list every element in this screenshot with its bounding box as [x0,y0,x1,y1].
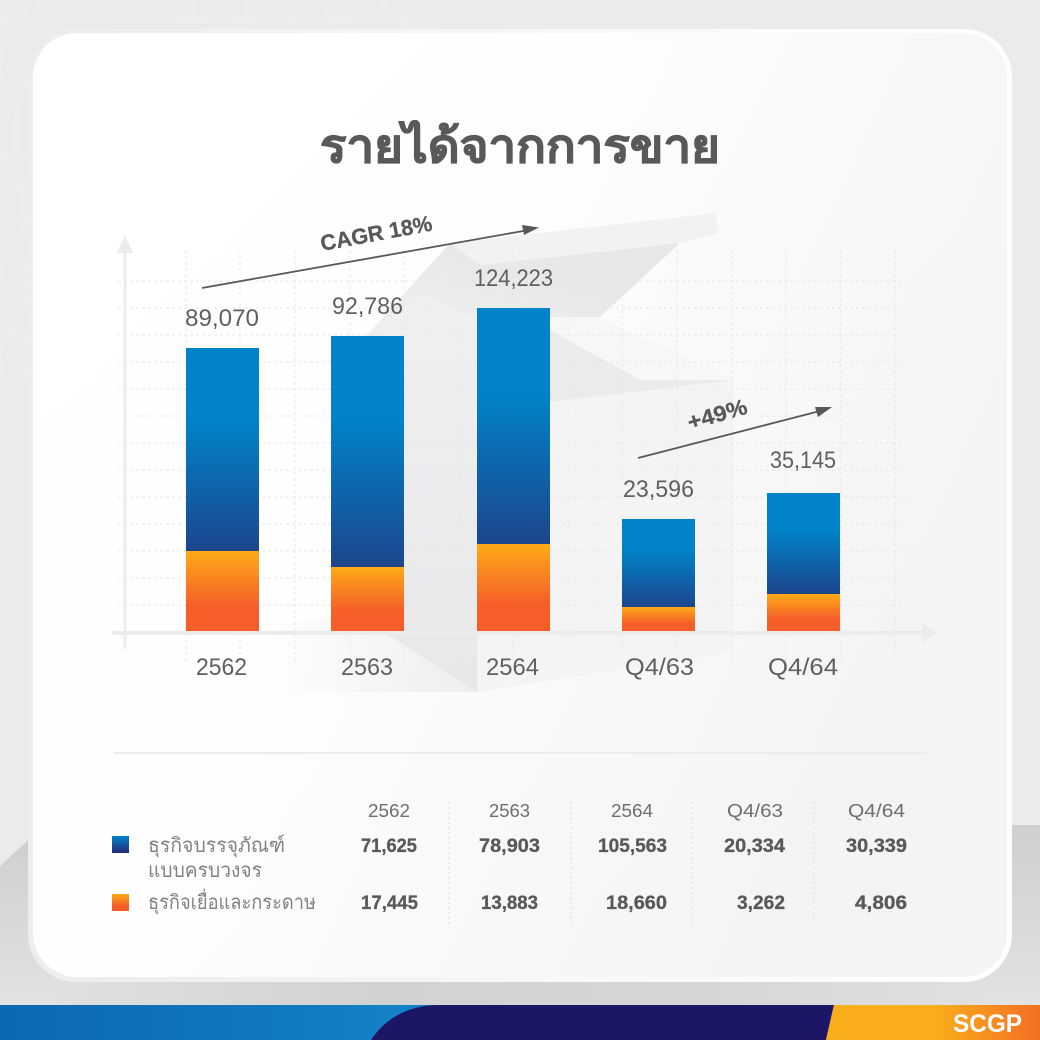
x axis labels [196,654,838,681]
row: packaging: แบบครบวงจร [148,860,262,882]
row: packaging [112,834,907,882]
row: fibre and paper: 18,660 [606,893,667,914]
table [112,801,907,925]
+49% label: +49% [684,394,750,435]
separator [114,752,926,754]
row: fibre and paper: 4,806 [855,893,907,914]
bar total labels: 92,786 [332,293,403,320]
row: fibre and paper: 17,445 [361,893,418,914]
arrow: +49% [638,407,832,458]
bar 2564 [477,308,550,631]
arrow: CAGR [202,225,539,288]
title: รายได้จากการขาย [320,120,720,172]
chart: grid and axes [112,235,937,664]
table header: 2562 [368,801,410,821]
table header: Q4/64 [848,801,905,821]
row: packaging: 105,563 [598,836,667,857]
footer band [0,1005,1040,1040]
row: packaging: 71,625 [361,836,417,857]
row: packaging: 30,339 [846,836,907,857]
bar total labels [185,265,836,503]
x axis labels: Q4/64 [768,654,838,681]
row: fibre and paper: ธุรกิจเยื่อและกระดาษ [148,888,316,915]
bar Q4/63 [622,519,695,631]
row: fibre and paper: 3,262 [737,893,785,914]
bar 2563 [331,336,404,631]
x axis labels: 2563 [341,654,393,681]
x axis labels: 2562 [196,654,247,681]
table header: 2564 [611,801,653,821]
bar total labels: 35,145 [770,447,836,474]
row: packaging: 78,903 [479,836,540,857]
x axis labels: 2564 [486,654,539,681]
bar total labels: 23,596 [623,476,694,503]
decorative box background [260,213,733,692]
bar total labels: 89,070 [185,305,259,332]
x axis labels: Q4/63 [625,654,694,681]
table header [368,801,905,821]
row: packaging: ธุรกิจบรรจุภัณฑ์ [148,834,285,858]
logo: SCGP: SCGP [953,1010,1022,1038]
bar Q4/64 [767,493,840,631]
table header: 2563 [489,801,530,821]
row: packaging: 20,334 [724,836,785,857]
bar total labels: 124,223 [474,265,553,292]
row: fibre and paper [112,888,907,915]
row: fibre and paper: 13,883 [481,893,538,914]
bar 2562 [186,348,259,631]
table header: Q4/63 [727,801,783,821]
CAGR label: CAGR 18% [318,211,434,256]
